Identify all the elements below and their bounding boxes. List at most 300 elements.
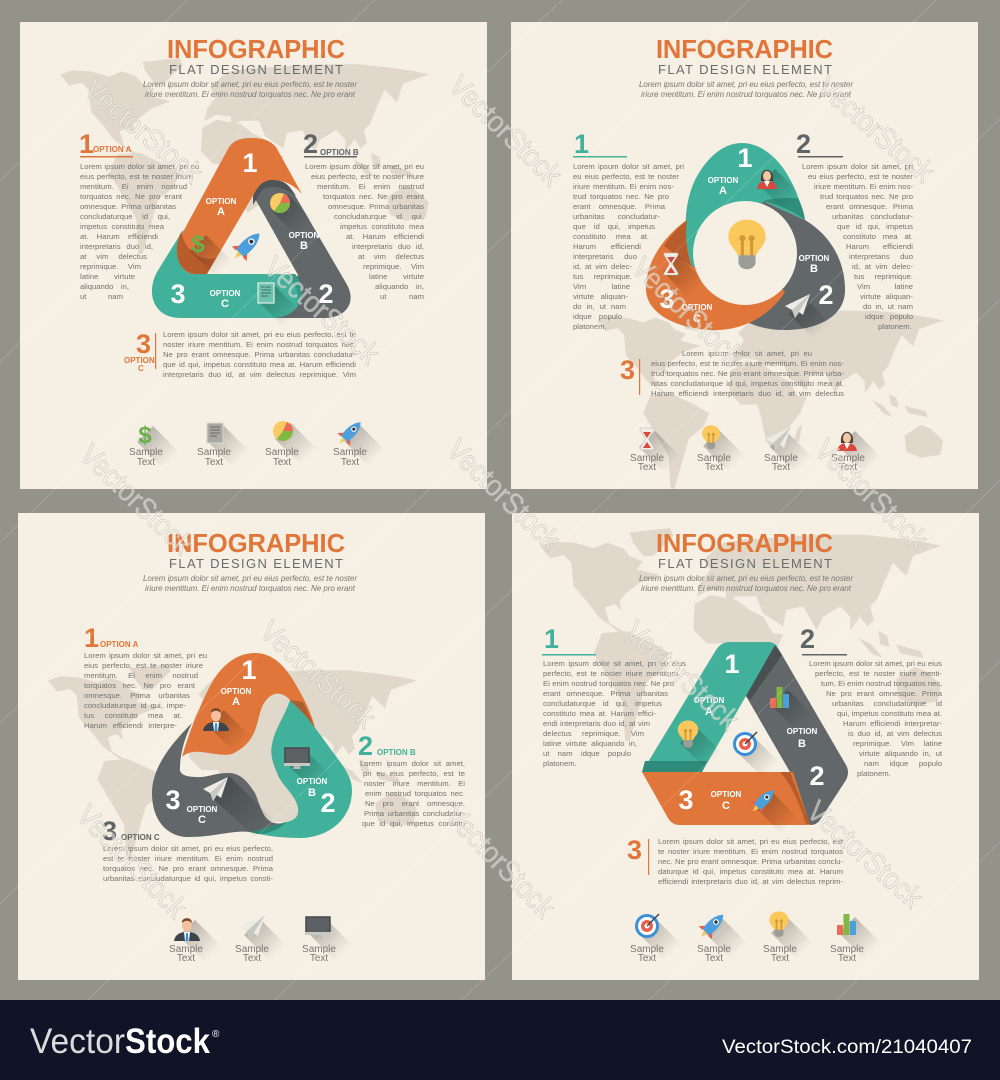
icon row: Text <box>273 457 291 468</box>
intro text: Lorem ipsum dolor sit amet, pri eu eius perfecto, est te noster <box>143 80 357 89</box>
text block: option B: enim nostrud torquatos nec. <box>365 789 465 798</box>
icon: rocket <box>227 226 267 266</box>
text block 2 <box>805 659 942 784</box>
world map background <box>48 664 417 860</box>
text block: option A: latine virtute <box>80 272 135 281</box>
text block 1: platonem. <box>573 322 607 331</box>
text block: option C: interpretaris duo id, at vim delectus reprimique. Vim <box>163 370 356 379</box>
map fill behind chart centre <box>215 695 302 822</box>
heading: option C: OPTION <box>124 356 155 365</box>
subtitle: FLAT DESIGN ELEMENT <box>169 62 343 77</box>
labels: 1 <box>724 649 740 679</box>
heading: option C <box>102 816 160 846</box>
text block 2: Lorem ipsum dolor sit amet, pri eu eius <box>809 659 942 668</box>
labels: B <box>300 240 308 252</box>
text block 1: ut nam idque populo <box>543 749 631 758</box>
icon row: Sample <box>129 447 163 458</box>
text block 1: perfecto, est te noster iriure mentitum. <box>543 669 680 678</box>
text block: option A: eius perfecto, est te noster iriure <box>84 661 203 670</box>
icon row: Text <box>705 462 723 473</box>
text block 1: constituto mea at. Harum effici- <box>543 709 656 718</box>
title: INFOGRAPHIC <box>656 530 833 558</box>
chart: rounded triangle <box>152 138 351 327</box>
text block 1: que id qui, impetus <box>573 222 655 231</box>
intro text <box>143 80 357 99</box>
intro text: iriure mentitum. Ei enim nostrud torquatos nec. Ne pro erant <box>145 584 356 593</box>
text block: option C: Lorem ipsum dolor sit amet, pri eu eius perfecto, <box>103 844 273 853</box>
text block: option C <box>103 844 278 889</box>
text block 3: Lorem ipsum dolor sit amet, pri eu eius perfecto, est <box>658 837 843 846</box>
text block: option B: torquatos nec. Ne pro erant <box>323 192 424 201</box>
text block 1: erant omnesque. Prima <box>573 202 665 211</box>
heading: option B: 2 <box>303 129 318 159</box>
labels: 3 <box>170 279 186 309</box>
footer id: VectorStock.com/21040407 <box>722 1037 972 1058</box>
text block: option B: at vim delectus <box>358 252 424 261</box>
text block 1: platonem. <box>543 759 577 768</box>
text block 1: iriure mentitum. Ei enim nos- <box>573 182 674 191</box>
labels: OPTION <box>187 805 218 814</box>
text block 2 <box>795 162 913 337</box>
icon row: Sample <box>235 944 269 955</box>
heading: option A: OPTION A <box>100 640 139 649</box>
text block 3 <box>658 837 846 892</box>
heading 3: 3 <box>620 355 635 385</box>
text block: option B: aliquando in, <box>375 282 424 291</box>
labels <box>678 649 825 815</box>
labels: B <box>810 263 818 275</box>
text block 1: erant omnesque. Prima urbanitas <box>543 689 668 698</box>
title: INFOGRAPHIC <box>167 36 345 64</box>
text block: option B: omnesque. Prima urbanitas <box>328 202 424 211</box>
text block 2: tus reprimique. <box>854 272 913 281</box>
icon row: Sample <box>697 453 731 464</box>
text block: option C: torquatos nec. Ne pro erant omnesque. Prima <box>103 864 273 873</box>
footer logo <box>30 1022 220 1061</box>
watermark overlay: VectorStock <box>253 615 382 735</box>
labels: OPTION <box>694 696 725 705</box>
text block 2: qui, impetus constituto mea at. <box>837 709 942 718</box>
text block: option A: torquatos nec. Ne pro erant <box>84 681 195 690</box>
labels: C <box>221 298 229 310</box>
watermark overlay: VectorStock <box>257 251 386 371</box>
world map background <box>597 305 943 489</box>
icon row <box>630 908 881 964</box>
text block 1: virtute aliquan- <box>573 292 628 301</box>
text block 2: platonem. <box>878 322 912 331</box>
icon: man <box>203 708 250 752</box>
text block 2: Ne pro erant omnesque. Prima <box>826 689 942 698</box>
icon row: Text <box>310 953 328 964</box>
heading 1 <box>573 129 627 159</box>
panel: organic three-blade infographic <box>18 513 485 980</box>
text block 1: id, at vim delec- <box>573 262 632 271</box>
text block 2: do in, ut nam <box>863 302 913 311</box>
icon row <box>129 416 385 468</box>
labels: C <box>198 814 206 826</box>
text block 1: interpretaris duo <box>573 252 637 261</box>
labels: A <box>217 206 225 218</box>
heading: option A <box>84 623 139 653</box>
intro text <box>639 80 853 99</box>
icon: dollar: $ <box>191 231 205 258</box>
text block: option A: ut nam <box>80 292 123 301</box>
text block 1: do in, ut nam <box>573 302 626 311</box>
text block: option B: eius perfecto, est te noster iriure <box>311 172 424 181</box>
icon: light bulb <box>728 220 766 269</box>
icon row: Sample <box>831 453 865 464</box>
panel: triangle infographic with options A B C <box>20 22 487 489</box>
icon: light bulb <box>678 721 722 769</box>
intro text: Lorem ipsum dolor sit amet, pri eu eius perfecto, est te noster <box>639 574 853 583</box>
text block 1: eu eius perfecto, est te noster <box>573 172 679 181</box>
text block 2: Harum efficiendi <box>846 242 913 251</box>
labels: OPTION <box>682 303 713 312</box>
labels: 3 <box>659 284 675 314</box>
labels: A <box>705 706 713 718</box>
subtitle: FLAT DESIGN ELEMENT <box>658 556 832 571</box>
icon: hourglass <box>663 253 705 298</box>
text block 3: eius perfecto, est te noster iriure mentitum. Ei enim nos- <box>651 359 844 368</box>
watermark overlay: VectorStock <box>618 615 746 737</box>
icon row: Text <box>638 462 656 473</box>
text block 1: Harum efficiendi <box>573 242 641 251</box>
heading: option C: C <box>138 364 144 373</box>
heading 2: 2 <box>796 129 811 159</box>
labels: 2 <box>818 280 834 310</box>
chart: three interlocking lobes <box>646 143 845 340</box>
watermark overlay: VectorStock <box>73 438 200 562</box>
icon: dollar <box>190 231 232 277</box>
text block 2: virtute aliquando in, ut <box>859 749 942 758</box>
text block 2: tum. Ei enim nostrud torquatos nec. <box>821 679 942 688</box>
heading: option A: OPTION A <box>93 145 132 154</box>
text block: option A: at vim delectus <box>80 252 147 261</box>
watermark overlay: VectorStock <box>438 799 562 925</box>
icon row: Text <box>771 953 789 964</box>
heading 3 <box>627 835 649 875</box>
text block 3: trud torquatos nec. Ne pro erant omnesque. Prima urba- <box>651 369 844 378</box>
world map background <box>60 58 429 254</box>
watermark overlay: VectorStock <box>808 433 935 557</box>
panel: circular three-lobe infographic <box>511 22 978 489</box>
text block 2: urbanitas concludatur- <box>832 212 913 221</box>
text block 1: trud torquatos nec. Ne pro <box>573 192 669 201</box>
text block: option B: interpretaris duo id, <box>352 242 424 251</box>
labels: 2 <box>318 279 334 309</box>
labels: 3 <box>165 785 181 815</box>
text block: option B: latine virtute <box>369 272 424 281</box>
text block: option A: Lorem ipsum dolor sit amet, pri eu <box>84 651 207 660</box>
labels: A <box>232 696 240 708</box>
text block: option A: tus constituto mea at. <box>84 711 182 720</box>
icon row: Sample <box>333 447 367 458</box>
text block 2: interpretaris duo <box>849 252 913 261</box>
intro text <box>143 574 357 593</box>
text block: option C: noster iriure mentitum. Ei enim nostrud torquatos nec. <box>163 340 356 349</box>
text block 3: te noster iriure mentitum. Ei enim nostrud torquatos <box>658 847 843 856</box>
icon row: Text <box>705 953 723 964</box>
icon row: Sample <box>169 944 203 955</box>
intro text: Lorem ipsum dolor sit amet, pri eu eius perfecto, est te noster <box>143 574 357 583</box>
icon row <box>169 915 352 964</box>
icon: bar chart <box>770 687 814 732</box>
text block 1: concludaturque id qui, impetus <box>543 699 662 708</box>
text block: option B: mentitum. Ei enim nostrud <box>317 182 424 191</box>
text block: option B: at. Harum efficiendi <box>346 232 424 241</box>
icon row: Sample <box>764 453 798 464</box>
heading 3: 3 <box>627 835 642 865</box>
text block 1: Lorem ipsum dolor sit amet, pri eu eius <box>543 659 686 668</box>
icon: paper plane <box>785 294 831 340</box>
labels: B <box>308 787 316 799</box>
icon row: Sample <box>630 453 664 464</box>
heading: option C: 3 <box>102 816 117 846</box>
labels: OPTION <box>210 289 241 298</box>
text block: option A: omnesque. Prima urbanitas <box>84 691 190 700</box>
heading: option C: OPTION C <box>121 833 160 842</box>
chart: three blades <box>152 653 352 838</box>
text block: option A: Lorem ipsum dolor sit amet, pri eu <box>80 162 199 171</box>
text block 2: urbanitas concludaturque id <box>832 699 942 708</box>
icon row: Sample <box>302 944 336 955</box>
footer logo: Vector <box>30 1022 125 1061</box>
icon: woman <box>757 169 801 211</box>
text block: option C: est te noster iriure mentitum. Ei enim nostrud <box>103 854 273 863</box>
intro text: iriure mentitum. Ei enim nostrud torquatos nec. Ne pro erant <box>641 90 852 99</box>
watermark overlay: VectorStock <box>78 73 209 191</box>
text block: option A: concludaturque id qui, <box>80 212 170 221</box>
text block: option B <box>355 759 465 834</box>
labels <box>170 148 334 310</box>
text block 3: efficiendi interpretaris duo id, at vim delectus reprim- <box>658 877 843 886</box>
text block 1: tus reprimique. <box>573 272 632 281</box>
text block 1: Ei enim nostrud torquatos nec. Ne pro <box>543 679 674 688</box>
labels <box>165 655 336 826</box>
watermark overlay: VectorStock <box>625 251 749 373</box>
heading: option B <box>358 731 416 761</box>
labels: 1 <box>242 148 258 178</box>
footer logo: ® <box>212 1029 220 1040</box>
text block 2: is duo id, at vim delectus <box>848 729 942 738</box>
text block 1: urbanitas concludatur- <box>573 212 660 221</box>
icon row: Text <box>838 953 856 964</box>
text block 2: perfecto, est te noster iriure menti- <box>815 669 942 678</box>
text block 1 <box>573 162 691 337</box>
text block: option A: concludaturque id qui, impe- <box>84 701 186 710</box>
icon row: Text <box>243 953 261 964</box>
watermark overlay: VectorStock <box>800 795 929 915</box>
text block: option C: urbanitas concludaturque id qui, impetus consti- <box>103 874 273 883</box>
text block 2: reprimique. Vim latine <box>853 739 942 748</box>
text block: option B: reprimique. Vim <box>363 262 424 271</box>
text block: option A: interpretaris duo id, <box>80 242 153 251</box>
intro text: Lorem ipsum dolor sit amet, pri eu eius perfecto, est te noster <box>639 80 853 89</box>
labels: 2 <box>809 761 825 791</box>
heading: option C <box>124 329 156 373</box>
text block 2: Harum efficiendi interpretar- <box>843 719 942 728</box>
footer bar <box>0 1000 1000 1080</box>
icon: paper plane <box>203 776 273 837</box>
text block 1: Vim latine <box>573 282 630 291</box>
world map background <box>540 528 941 741</box>
labels: C <box>722 800 730 812</box>
intro text <box>639 574 853 593</box>
text block: option C: que id qui, impetus constituto mea at. Harum efficiendi <box>163 360 356 369</box>
text block: option B: Ne pro erant omnesque. <box>365 799 465 808</box>
labels <box>659 143 834 325</box>
labels: A <box>719 185 727 197</box>
text block: option B: concludaturque id qui, <box>334 212 424 221</box>
labels: OPTION <box>297 777 328 786</box>
text block: option A <box>80 162 205 307</box>
heading 1: 1 <box>574 129 589 159</box>
text block 1: idque populo <box>573 312 622 321</box>
text block 2: iriure mentitum. Ei enim nos- <box>814 182 913 191</box>
text block 3: Lorem ipsum dolor sit amet, pri eu <box>682 349 812 358</box>
text block 2: idque populo <box>865 312 913 321</box>
text block 1: constituto mea at. <box>573 232 649 241</box>
icon row: Text <box>772 462 790 473</box>
heading: option A: 1 <box>84 623 99 653</box>
subtitle: FLAT DESIGN ELEMENT <box>169 556 343 571</box>
text block: option B: Prima urbanitas concludatur- <box>364 809 465 818</box>
labels: OPTION <box>799 254 830 263</box>
labels: OPTION <box>206 197 237 206</box>
icon: target <box>733 732 779 778</box>
labels: C <box>693 313 701 325</box>
labels: OPTION <box>708 176 739 185</box>
labels: OPTION <box>787 727 818 736</box>
icon row: Sample <box>830 944 864 955</box>
icon row: Text <box>205 457 223 468</box>
icon: monitor <box>284 748 331 792</box>
icon row: Text <box>137 457 155 468</box>
heading: option B <box>303 129 359 159</box>
text block 1: delectus reprimique. Vim <box>543 729 644 738</box>
text block 3 <box>648 349 848 404</box>
text block: option B: ut nam <box>380 292 424 301</box>
text block 2: trud torquatos nec. Ne pro <box>820 192 913 201</box>
icon row: Text <box>839 462 857 473</box>
icon row: Sample <box>763 944 797 955</box>
panel: folded triangle infographic <box>512 513 979 980</box>
labels: OPTION <box>221 687 252 696</box>
labels: 1 <box>241 655 257 685</box>
heading 3 <box>620 355 640 395</box>
text block 1 <box>543 659 691 774</box>
text block: option C: Lorem ipsum dolor sit amet, pri eu eius perfecto, est te <box>163 330 356 339</box>
icon row: Text <box>638 953 656 964</box>
icon: document <box>258 283 300 327</box>
watermark overlay: VectorStock <box>70 799 194 925</box>
text block: option A: torquatos nec. Ne pro erant <box>80 192 182 201</box>
icon row: $ <box>138 422 152 449</box>
text block: option A <box>84 651 212 736</box>
text block 2: constituto mea at. <box>843 232 913 241</box>
labels: B <box>798 738 806 750</box>
text block 1: latine virtute aliquando in, <box>543 739 637 748</box>
text block: option B: Lorem ipsum dolor sit amet, <box>360 759 465 768</box>
text block: option B: noster iriure mentitum. Ei <box>364 779 465 788</box>
text block: option C: Ne pro erant omnesque. Prima urbanitas concludatur- <box>163 350 356 359</box>
text block: option B: impetus constituto mea <box>340 222 424 231</box>
title: INFOGRAPHIC <box>167 530 345 558</box>
text block: option A: mentitum. Ei enim nostrud <box>80 182 187 191</box>
text block: option C <box>163 330 359 385</box>
heading 2 <box>796 129 843 159</box>
text block: option A: at. Harum efficiendi <box>80 232 158 241</box>
text block: option A: mentitum. Ei enim nostrud <box>84 671 198 680</box>
heading 1 <box>542 624 596 656</box>
labels: 1 <box>737 143 753 173</box>
icon row: Text <box>177 953 195 964</box>
text block 2: Lorem ipsum dolor sit amet, pri <box>802 162 913 171</box>
icon row: Text <box>341 457 359 468</box>
text block 3: Harum efficiendi interpretaris duo id, at vim delectus <box>651 389 844 398</box>
watermark overlay: VectorStock <box>440 433 567 557</box>
text block 3: nec. Ne pro erant omnesque. Prima urbanitas conclu- <box>658 857 843 866</box>
text block 3: nitas concludaturque id qui, impetus constituto mea at. <box>651 379 844 388</box>
icon row: Sample <box>197 447 231 458</box>
labels: OPTION <box>289 231 320 240</box>
text block: option B: Lorem ipsum dolor sit amet, pri eu <box>305 162 424 171</box>
heading 1: 1 <box>544 624 559 654</box>
labels: OPTION <box>711 790 742 799</box>
title: INFOGRAPHIC <box>656 36 833 64</box>
text block 2: nam idque populo <box>864 759 942 768</box>
text block 2: erant omnesque. Prima <box>826 202 913 211</box>
labels: 3 <box>678 785 694 815</box>
heading 2 <box>800 624 847 656</box>
chart: folded triangle <box>642 642 848 834</box>
heading: option B: OPTION B <box>320 148 359 157</box>
icon row: Sample <box>630 944 664 955</box>
icon row: Sample <box>697 944 731 955</box>
text block 2: platonem. <box>857 769 891 778</box>
text block: option A: reprimique. Vim <box>80 262 141 271</box>
labels: 2 <box>320 788 336 818</box>
watermark overlay: VectorStock <box>442 69 569 193</box>
text block 1: endi interpretaris duo id, at vim <box>543 719 650 728</box>
text block 2: virtute aliquan- <box>860 292 913 301</box>
icon row: Sample <box>265 447 299 458</box>
text block: option A: eius perfecto, est te noster iriure <box>80 172 193 181</box>
heading: option C: 3 <box>136 329 151 359</box>
text block 2: Vim latine <box>857 282 913 291</box>
text block 1: Lorem ipsum dolor sit amet, pri <box>573 162 684 171</box>
text block 3: daturque id qui, impetus constituto mea at. Harum <box>658 867 843 876</box>
icon: rocket <box>746 784 798 834</box>
text block 2: eu eius perfecto, est te noster <box>808 172 913 181</box>
heading: option A <box>79 129 133 159</box>
text block: option B: que id qui, impetus constitu <box>362 819 465 828</box>
text block: option B: pri eu eius perfecto, est te <box>363 769 465 778</box>
watermark overlay: VectorStock <box>810 70 941 190</box>
intro text: iriure mentitum. Ei enim nostrud torquatos nec. Ne pro erant <box>145 90 356 99</box>
icon: pie chart <box>270 193 314 237</box>
text block 2: que id qui, impetus <box>837 222 913 231</box>
text block: option A: omnesque. Prima urbanitas <box>80 202 176 211</box>
text block: option B <box>300 162 424 307</box>
heading: option B: OPTION B <box>377 748 416 757</box>
footer logo: Stock <box>125 1022 210 1061</box>
heading: option A: 1 <box>79 129 94 159</box>
text block 2: id, at vim delec- <box>852 262 913 271</box>
text block: option A: Harum efficiendi interpre- <box>84 721 177 730</box>
text block: option A: impetus constituto mea <box>80 222 164 231</box>
intro text: iriure mentitum. Ei enim nostrud torquatos nec. Ne pro erant <box>641 584 852 593</box>
